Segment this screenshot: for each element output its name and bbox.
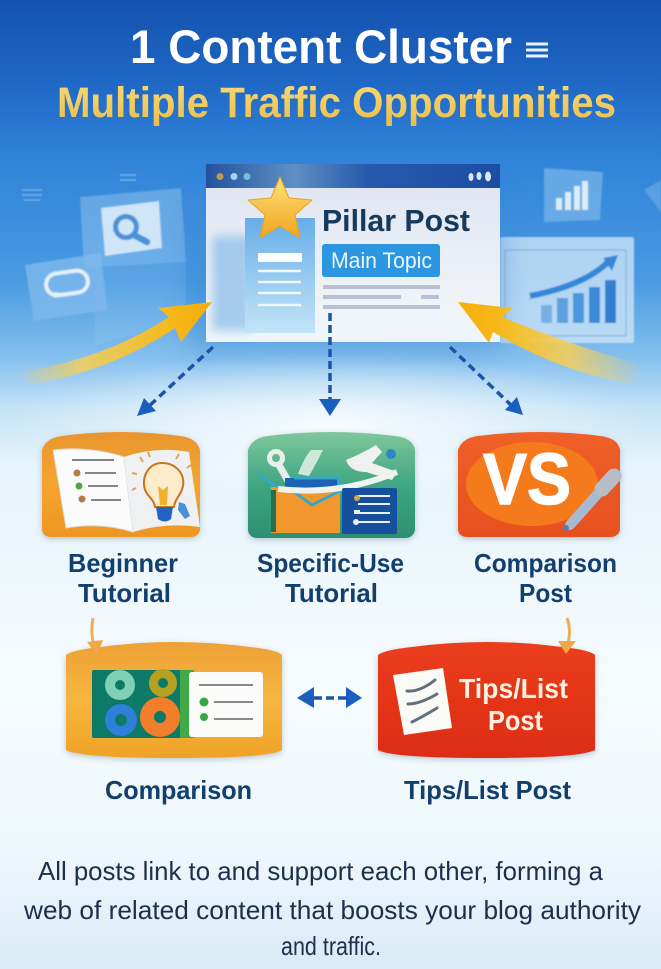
heading: pillar post: Pillar Post bbox=[322, 203, 470, 238]
arrow: dashed center bbox=[319, 313, 341, 416]
card: comparison post icon bbox=[458, 432, 620, 537]
button: main topic: Main Topic bbox=[331, 248, 432, 273]
list card bbox=[189, 672, 263, 737]
decorative background tiles bbox=[22, 168, 661, 345]
icon: pen bbox=[563, 476, 614, 531]
arrow: gold left bbox=[15, 302, 212, 384]
note bbox=[393, 668, 452, 735]
icon: brush bbox=[298, 450, 323, 476]
tips text: Tips/List bbox=[459, 673, 568, 704]
icon: water drop bbox=[386, 449, 396, 459]
icon: bars tile bbox=[544, 168, 603, 222]
icon: wrench bbox=[270, 452, 291, 486]
arrow: small left connector bbox=[87, 618, 103, 656]
summary text bbox=[23, 856, 641, 961]
title line 1: 1 Content Cluster bbox=[130, 20, 512, 73]
panel: pillar post window bbox=[190, 164, 500, 348]
icon: star bbox=[248, 177, 312, 238]
document bbox=[245, 218, 315, 333]
tool box bbox=[258, 472, 397, 533]
label: comparison post: Post bbox=[519, 578, 572, 608]
card: specific-use tutorial icon bbox=[248, 432, 415, 538]
arrow: double dashed bbox=[297, 687, 362, 708]
book right page bbox=[124, 450, 200, 532]
arrow: small right connector bbox=[558, 618, 576, 654]
button: main topic bbox=[322, 244, 440, 277]
label: specific-use tutorial: Tutorial bbox=[285, 578, 378, 608]
icon: hammer bbox=[346, 445, 397, 480]
arrow: dashed left bbox=[137, 347, 213, 416]
window body bbox=[206, 186, 500, 342]
book left page bbox=[53, 449, 133, 532]
book lines bbox=[72, 460, 121, 502]
icon: light bulb bbox=[132, 452, 191, 522]
window title bar bbox=[206, 164, 500, 188]
summary text: web of related content that boosts your blog authority bbox=[23, 895, 641, 925]
title equals sign bbox=[526, 44, 548, 56]
card: tips list post icon bbox=[378, 642, 595, 758]
label: comparison: Comparison bbox=[105, 775, 252, 805]
arrow: dashed right bbox=[450, 347, 523, 415]
shelf bbox=[92, 670, 192, 738]
label: beginner tutorial: Beginner bbox=[68, 548, 178, 578]
label: tips list post: Tips/List Post bbox=[404, 775, 571, 805]
tips text: Post bbox=[488, 705, 543, 736]
label: specific-use tutorial: Specific-Use bbox=[257, 548, 404, 578]
card: comparison icon bbox=[66, 642, 282, 758]
icon: chat tile bbox=[25, 253, 107, 321]
text lines bbox=[323, 285, 440, 309]
icon: growth chart panel bbox=[500, 237, 634, 343]
title line 2: Multiple Traffic Opportunities bbox=[57, 79, 616, 127]
icon: vs: VS bbox=[483, 440, 571, 520]
window buttons bbox=[216, 173, 250, 180]
list panel bbox=[342, 488, 397, 534]
label: beginner tutorial bbox=[68, 548, 178, 608]
background glow bbox=[10, 353, 650, 497]
rings bbox=[110, 674, 173, 731]
label: beginner tutorial: Tutorial bbox=[78, 578, 171, 608]
icon: search tile bbox=[101, 201, 162, 256]
label: specific-use tutorial bbox=[257, 548, 404, 608]
window controls bbox=[468, 172, 491, 182]
label: comparison post bbox=[474, 548, 617, 608]
highlight bbox=[466, 442, 598, 526]
summary text: All posts link to and support each other, forming a bbox=[38, 856, 604, 886]
window shadow bbox=[190, 200, 500, 348]
card: beginner tutorial icon bbox=[42, 432, 200, 537]
left translucent panel bbox=[80, 188, 186, 268]
tips text bbox=[459, 673, 568, 736]
arrow: gold right bbox=[458, 302, 645, 384]
document shadow bbox=[212, 236, 252, 331]
summary text: and traffic. bbox=[281, 931, 381, 961]
label: comparison post: Comparison bbox=[474, 548, 617, 578]
